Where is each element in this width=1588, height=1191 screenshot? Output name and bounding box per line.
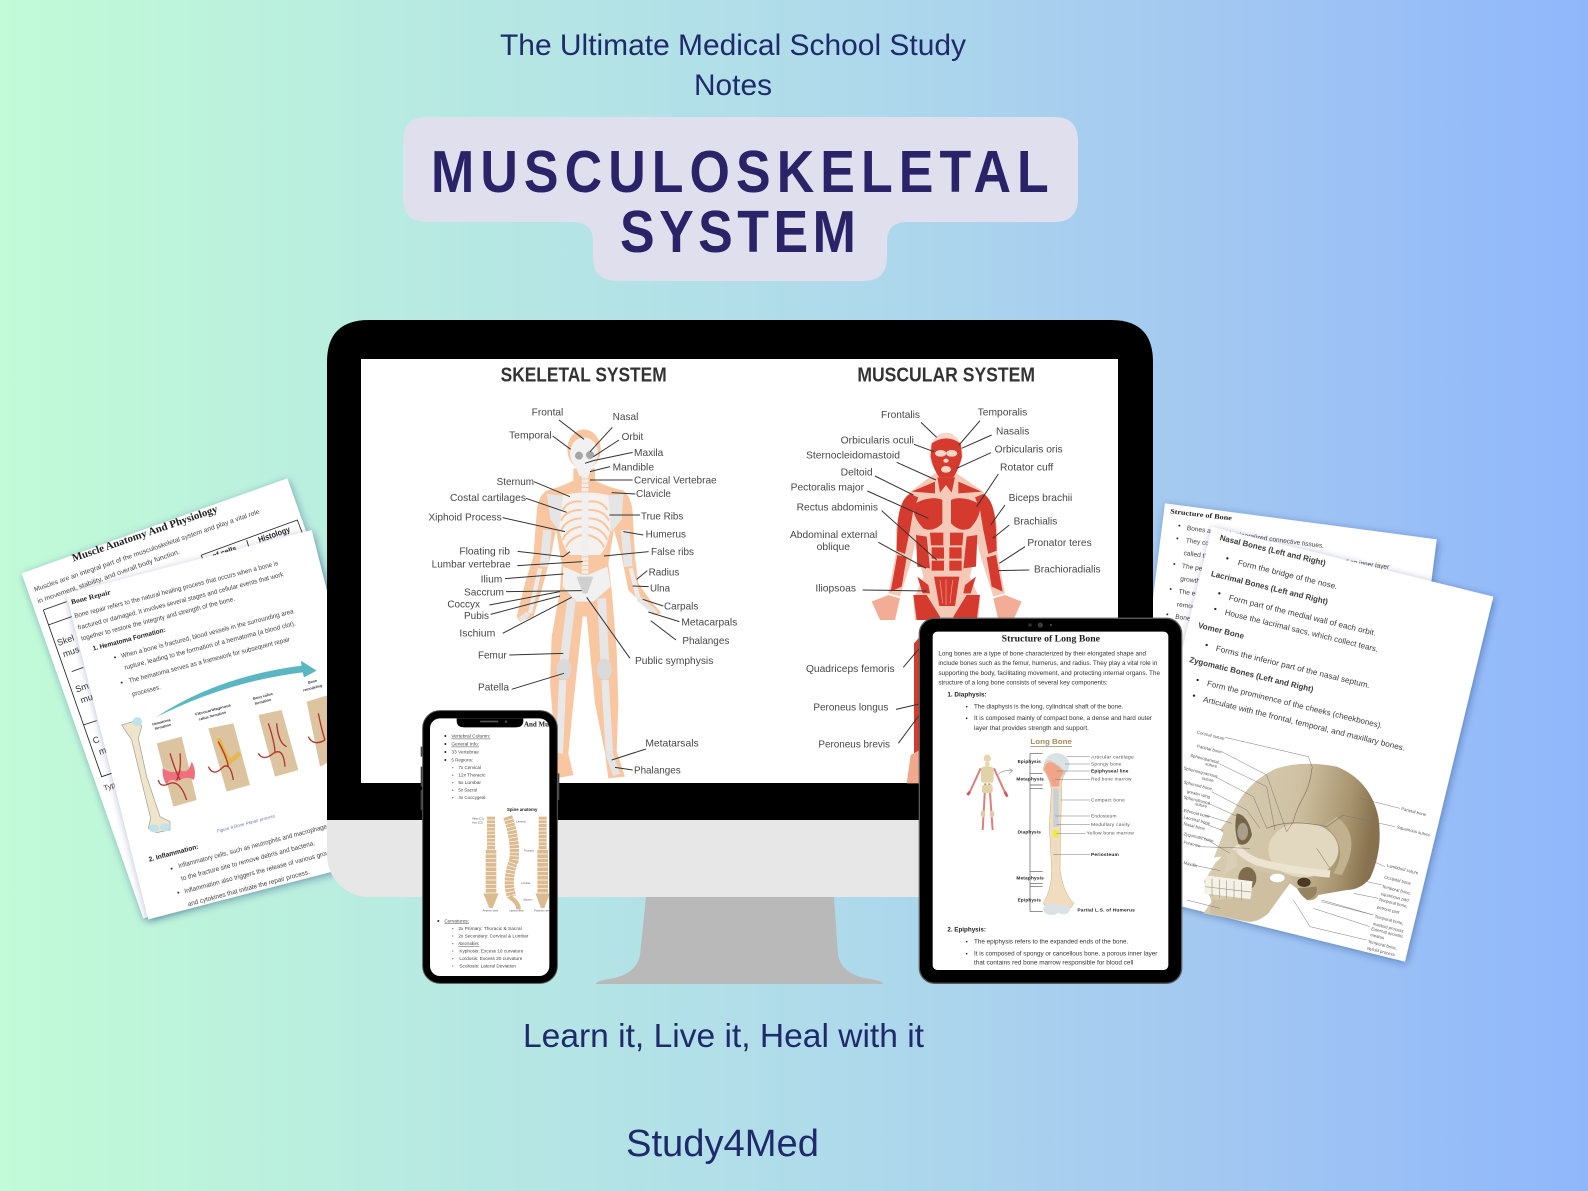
diagram: bone healing stages: Bone (308, 679, 317, 685)
muscular labels: Rectus abdominis (797, 502, 878, 513)
front sheet: facial bones and skull: Form the prominence of the cheeks (cheekbones). (1206, 679, 1384, 730)
illustration: spine anatomy views (472, 816, 551, 912)
diagram: bone healing stages: remodeling (303, 684, 323, 693)
phone screen content: 33 Vertebrae (451, 750, 479, 756)
skull callouts: Zygomatic bone (1183, 831, 1215, 844)
skeletal labels: Patella (478, 683, 510, 694)
muscular labels: Nasalis (996, 426, 1030, 437)
front sheet: bone repair: fractured or damaged. It involves several stages and cellular events that work (77, 571, 285, 632)
phone screen content: 2x Primary: Thoracic & Sacral (458, 926, 522, 932)
skull callouts: styloid process (1366, 945, 1395, 957)
muscular labels (790, 408, 1101, 750)
skull callouts: meatus (1370, 932, 1385, 940)
muscular labels: Brachioradialis (1034, 565, 1101, 576)
illustration: spine anatomy views: Lateral view (509, 908, 524, 912)
diagram: long bone: Red bone marrow (1091, 777, 1132, 782)
tablet text: supporting the body, facilitating movement, and protecting internal organs. The (938, 670, 1160, 677)
phone screen content: Vertebral Column: (451, 734, 490, 740)
skeletal labels: Femur (478, 650, 507, 661)
front sheet: bone repair (66, 530, 394, 919)
monitor (327, 320, 1153, 897)
diagram: long bone: Epiphyseal line (1091, 769, 1129, 774)
tagline: Learn it, Live it, Heal with it (523, 1017, 924, 1054)
back sheet: muscle anatomy: m (97, 745, 108, 757)
muscular labels: Abdominal external (790, 530, 877, 541)
muscular labels: Iliopsoas (815, 584, 856, 595)
skeletal labels: Humerus (646, 530, 686, 541)
back sheet: structure of bone: growth and repair (1180, 576, 1233, 590)
subtitle: Notes (694, 69, 772, 102)
back sheet: muscle anatomy (22, 478, 409, 918)
muscular labels: Rotator cuff (1000, 463, 1054, 474)
front sheet: bone repair: to the fracture site to remove debris and bacteria. (180, 840, 316, 883)
phone screen content: Kyphosis: Excess 10 curvature (459, 948, 524, 954)
skull callouts: Sphenosquamous (1183, 765, 1218, 779)
skull callouts (1183, 729, 1431, 957)
diagram: long bone: Endosteum (1091, 814, 1117, 819)
skull callouts: External acoustic (1371, 926, 1405, 939)
skeletal labels: True Ribs (641, 512, 684, 523)
front sheet: bone repair: Figure 8 Bone Repair process (216, 813, 276, 834)
back sheet: structure of bone: Bone marrow (1175, 614, 1215, 626)
diagram: bone healing stages: Fibrocartilaginous (195, 703, 231, 717)
figure: lower leg sliver (907, 637, 920, 783)
tablet text: The diaphysis is the long, cylindrical shaft of the bone. (974, 703, 1124, 710)
illustration: spine anatomy views: Atlas (C1) (472, 816, 484, 820)
tablet body (919, 618, 1182, 983)
muscular labels: Peroneus brevis (818, 739, 890, 750)
illustration: spine anatomy views: Anterior view (483, 908, 498, 912)
skull callouts: greater wing (1186, 789, 1211, 800)
skull callouts: Parietal bone (1196, 743, 1223, 755)
phone screen content: Scoliosis: Lateral Deviation (459, 963, 516, 969)
skeletal labels: Coccyx (447, 600, 480, 611)
skull callouts: Parietal bone (1401, 806, 1427, 817)
subtitle (500, 29, 966, 102)
skeletal labels: Carpals (664, 601, 698, 612)
diagram: long bone: Epiphysis (1018, 759, 1041, 764)
skeletal labels: Floating rib (459, 547, 510, 558)
diagram: long bone: Long Bone (1030, 737, 1072, 746)
front sheet: facial bones and skull: House the lacrimal sacs, which collect tears. (1224, 608, 1379, 654)
tablet text: structure of a long bone consists of several key components: (938, 680, 1108, 687)
skull callouts: suture (1205, 761, 1218, 769)
phone screen content: 4x Coccygeal (458, 795, 485, 801)
diagram: bone healing stages: callus formation (198, 710, 227, 722)
diagram: long bone: Metaphysis (1016, 776, 1044, 781)
front sheet: facial bones and skull: Lacrimal Bones (Left and Right) (1210, 569, 1329, 606)
phone screen content: Curvatures: (444, 918, 469, 924)
illustration: spine anatomy views: Sacrum (523, 898, 533, 902)
skull callouts: Coronal suture (1196, 729, 1226, 741)
skeletal labels (428, 407, 737, 776)
diagram: long bone: Periosteum (1091, 852, 1119, 857)
illustration: spine anatomy views: Thoracic (524, 849, 535, 853)
screen: muscular system chart: MUSCULAR SYSTEM (857, 365, 1035, 387)
muscular labels: Biceps brachii (1009, 493, 1072, 504)
skeletal labels: Maxila (634, 448, 664, 459)
arrow: skeleton to bone detail (997, 769, 1013, 775)
skeletal labels: Orbit (622, 432, 644, 443)
skull callouts: mastoid process (1372, 921, 1404, 934)
back sheet: muscle anatomy: C (91, 734, 101, 746)
muscular labels: Pectoralis major (791, 482, 865, 493)
front sheet: facial bones and skull (1124, 527, 1493, 962)
tablet text (938, 635, 1160, 967)
tablet text: It is composed of spongy or cancellous bone, a porous inner layer (974, 950, 1157, 957)
front sheet: bone repair: The hematoma serves as a framework for subsequent repair (128, 636, 291, 685)
skeletal labels: Phalanges (634, 765, 681, 776)
muscular labels: Orbicularis oris (995, 445, 1063, 456)
tablet text: Structure of Long Bone (1002, 635, 1100, 645)
back sheet: muscle anatomy: mus (61, 644, 81, 659)
subtitle: The Ultimate Medical School Study (500, 29, 966, 62)
phone screen content: General Info: (451, 742, 479, 748)
phone screen content: Spine anatomy (507, 807, 538, 813)
tablet mockup: structure of long bone (919, 618, 1182, 983)
diagram: long bone: Compact bone (1091, 798, 1125, 803)
muscular labels: Orbicularis oculi (841, 436, 914, 447)
phone screen content: 2x Secondary: Cervical & Lumbar (458, 933, 529, 939)
monitor stand (596, 897, 883, 984)
phone screen content: 12x Thoracic (458, 773, 486, 779)
skeletal labels: Cervical Vertebrae (634, 476, 717, 487)
muscular labels: Frontalis (881, 410, 920, 421)
back sheet: structure of bone: Bones are rigid, mineralized connective tissues. (1186, 525, 1325, 550)
phone screen content: Lordosis: Excess 20 curvature (459, 956, 523, 962)
phone screen content: 5x Lumbar (458, 780, 481, 786)
skeletal labels: Pubis (464, 611, 489, 622)
skeletal callout lines (489, 420, 679, 770)
front sheet: facial bones and skull: Form part of the medial wall of each orbit. (1228, 593, 1377, 638)
skeletal labels: Ulna (650, 583, 671, 594)
back sheet: muscle anatomy: Muscles are an integral part of the musculoskeletal system and play a vital role (33, 508, 261, 594)
skeletal labels: Metatarsals (645, 738, 699, 749)
skeletal labels: Metacarpals (681, 618, 737, 629)
back sheet: structure of bone: They consist of a dense outer layer of compact bone and an inner layer (1185, 537, 1390, 571)
back sheet: muscle anatomy: Muscle Anatomy And Physiology (71, 504, 220, 565)
back sheet: structure of bone: Structure of Bone (1170, 507, 1232, 522)
title banner (403, 117, 1078, 281)
phone screen content: And Muscles (524, 721, 563, 729)
tablet text: that contains red bone marrow responsible for blood cell (974, 960, 1133, 967)
front sheet: bone repair: When a bone is fractured, blood vessels in the surrounding area (120, 608, 295, 660)
skeletal labels: False ribs (651, 547, 694, 558)
back sheet: structure of bone (1135, 503, 1437, 777)
icon: small skeleton (967, 755, 1007, 830)
diagram: bone healing stages: formation (254, 698, 272, 706)
back sheet: muscle anatomy: Histology (257, 524, 292, 545)
front sheet: bone repair: and cytokines that initiate the repair process. (187, 869, 311, 908)
skull callouts: Sphenoparietal (1190, 753, 1219, 765)
front sheet: facial bones and skull: Forms the inferior part of the nasal septum. (1215, 644, 1371, 690)
muscular callout lines (863, 421, 1029, 743)
skeletal labels: Public symphysis (635, 656, 714, 667)
muscular labels: Deltoid (841, 468, 873, 479)
front sheet: bone repair: processes. (131, 684, 162, 698)
skull callouts: Temporal bone, (1367, 939, 1398, 951)
illustration: spine anatomy views: Cervical (516, 820, 526, 824)
back sheet: structure of bone: called the spongy bone (1183, 550, 1252, 566)
front sheet: bone repair: 2. Inflammation: (148, 844, 199, 864)
right paper stack (1124, 503, 1493, 962)
tablet text: It is composed mainly of compact bone, a dense and hard outer (974, 715, 1152, 722)
skeletal labels: Mandible (613, 462, 654, 473)
back sheet: structure of bone: remodeling (1176, 601, 1210, 613)
muscular labels: oblique (817, 542, 850, 553)
diagram: long bone: Spongy bone (1091, 762, 1122, 767)
muscular labels: Brachialis (1014, 517, 1057, 528)
phone screen content: 7x Cervical (458, 765, 481, 771)
front sheet: facial bones and skull: Articulate with the frontal, temporal, and maxillary bones. (1202, 695, 1406, 753)
illustration: spine anatomy views: Lumbar (521, 881, 530, 885)
front sheet: facial bones and skull: Form the bridge of the nose. (1237, 558, 1338, 591)
back sheet: muscle anatomy: Typ (102, 780, 116, 793)
illustration: spine anatomy views: Posterior view (534, 908, 551, 912)
brand name: Study4Med (626, 1123, 819, 1165)
skull callouts: Foramen (1183, 839, 1202, 849)
phone mockup: spine notes (421, 711, 563, 983)
skull callouts: Squamous suture (1396, 824, 1431, 838)
skeletal labels: Xiphoid Process (428, 513, 502, 524)
muscular labels: Quadriceps femoris (806, 664, 895, 675)
front sheet: facial bones and skull: Nasal Bones (Left and Right) (1219, 533, 1327, 568)
front sheet: bone repair: Inflammatory cells, such as neutrophils and macrophages (178, 822, 331, 870)
skull callouts: Sphenofrontal (1183, 794, 1210, 806)
skeletal labels: Lumbar vertebrae (432, 560, 511, 571)
back sheet: structure of bone: The endosteum lines cavity (1178, 588, 1260, 606)
diagram: long bone: Diaphysis (1018, 829, 1041, 834)
back sheet: muscle anatomy: mu (79, 692, 94, 705)
skeletal labels: Frontal (532, 407, 563, 418)
skeletal labels: Nasal (613, 412, 638, 423)
figure: muscular body (872, 433, 1022, 620)
skull callouts: Lacrimal bone (1183, 814, 1211, 826)
muscular labels: Peroneus longus (813, 703, 888, 714)
skull callouts: Sphenoid bone, (1183, 779, 1214, 792)
diagram: long bone: Epiphysis (1018, 897, 1041, 902)
front sheet: bone repair: 1. Hematoma Formation: (92, 627, 166, 653)
back sheet: muscle anatomy: in movement, stability, and overall body function. (37, 549, 181, 605)
front sheet: facial bones and skull: Vomer Bone (1197, 621, 1246, 641)
front sheet: bone repair: Bone repair refers to the natural healing process that occurs when a bone is (74, 560, 280, 620)
skull callouts: squamous part (1380, 891, 1410, 903)
muscular labels: Pronator teres (1027, 538, 1092, 549)
skeletal labels: Clavicle (636, 489, 671, 500)
tablet text: include bones such as the femur, humerus, and radius. They play a vital role in (938, 660, 1158, 667)
phone screen content: Abnormalities: (458, 941, 479, 947)
title banner: SYSTEM (620, 199, 856, 265)
skull callouts: suture (1201, 775, 1215, 783)
screen: muscular system chart (790, 365, 1101, 783)
tablet text: 1. Diaphysis: (947, 692, 987, 699)
tablet text: 2. Epiphysis: (947, 926, 986, 933)
skull callouts: Maxilla (1183, 860, 1198, 868)
back sheet: structure of bone: The periosteum covers bone (1181, 563, 1266, 581)
skull callouts: Temporal bone, (1381, 884, 1412, 896)
front sheet: bone repair: Bone Repair (70, 588, 112, 606)
diagram: bone healing stages (152, 679, 333, 807)
diagram: long bone (967, 737, 1135, 915)
skull callouts: Ethmoid bone (1183, 808, 1211, 819)
diagram: long bone: Medullary cavity (1091, 822, 1131, 827)
skeletal labels: Radius (649, 568, 680, 579)
diagram: long bone: Yellow bone marrow (1087, 831, 1135, 836)
phone screen content: 5 Regions: (451, 758, 473, 764)
tablet text: layer that provides strength and support. (974, 725, 1089, 732)
skull callouts: Temporal bone, (1378, 897, 1408, 909)
back sheet: muscle anatomy: Skel (56, 633, 75, 648)
screen: skeletal system chart (428, 365, 737, 778)
front sheet: bone repair: Inflammation also triggers the release of various growth factors (184, 843, 357, 895)
skull callouts: Nasal bone (1183, 821, 1206, 831)
phone body (421, 711, 559, 983)
phone screen content: 5x Sacral (458, 788, 477, 794)
diagram: bone healing stages: Bony callus (253, 692, 273, 701)
diagram: bone healing stages: Hematoma (152, 718, 172, 727)
back sheet: muscle anatomy: of cells (211, 544, 238, 561)
skull callouts: petrous part (1376, 904, 1401, 915)
skeletal labels: Saccrum (464, 588, 504, 599)
skeletal labels: Ilium (481, 574, 502, 585)
skull callouts: Lambdoid suture (1386, 863, 1419, 876)
skeletal labels: Costal cartilages (450, 493, 526, 504)
diagram: bone healing stages: formation (154, 723, 172, 731)
front sheet: bone repair: together to restore the integrity and strength of the bone. (80, 596, 236, 643)
skeletal labels: Phalanges (682, 636, 730, 647)
tablet text: Long bones are a type of bone characterized by their elongated shape and (938, 650, 1146, 657)
tablet text: The epiphysis refers to the expanded ends of the bone. (974, 938, 1129, 945)
diagram: long bone: Metaphysis (1016, 876, 1044, 881)
illustration: human skull side view (1203, 764, 1380, 922)
phone screen content (437, 718, 550, 968)
icon: femur (122, 717, 170, 833)
back sheet: muscle anatomy: Sm (74, 681, 90, 695)
left paper stack (22, 478, 409, 919)
skull callouts: Temporal bone, (1374, 914, 1404, 926)
diagram: long bone: Articular cartilage (1091, 754, 1134, 759)
skeletal labels: Sternum (497, 477, 534, 488)
screen: skeletal system chart: SKELETAL SYSTEM (501, 365, 667, 387)
front sheet: facial bones and skull: Zygomatic Bones (Left and Right) (1189, 655, 1315, 694)
figure: skeleton (517, 429, 662, 778)
diagram: long bone: Partial L.S. of Humerus (1077, 908, 1135, 913)
front sheet: bone repair: rupture, leading to the formation of a hematoma (a blood clot). (124, 620, 297, 672)
title banner: MUSCULOSKELETAL (431, 139, 1049, 205)
muscular labels: Sternocleidomastoid (806, 451, 900, 462)
skull callouts: suture (1195, 801, 1208, 809)
muscular labels: Temporalis (978, 408, 1028, 419)
skeletal labels: Ischium (459, 628, 495, 639)
arrow: teal healing progression (156, 661, 317, 717)
skeletal labels: Temporal (509, 431, 552, 442)
illustration: spine anatomy views: Axis (C2) (472, 820, 483, 824)
skull callouts: Occipital bone (1384, 874, 1412, 886)
